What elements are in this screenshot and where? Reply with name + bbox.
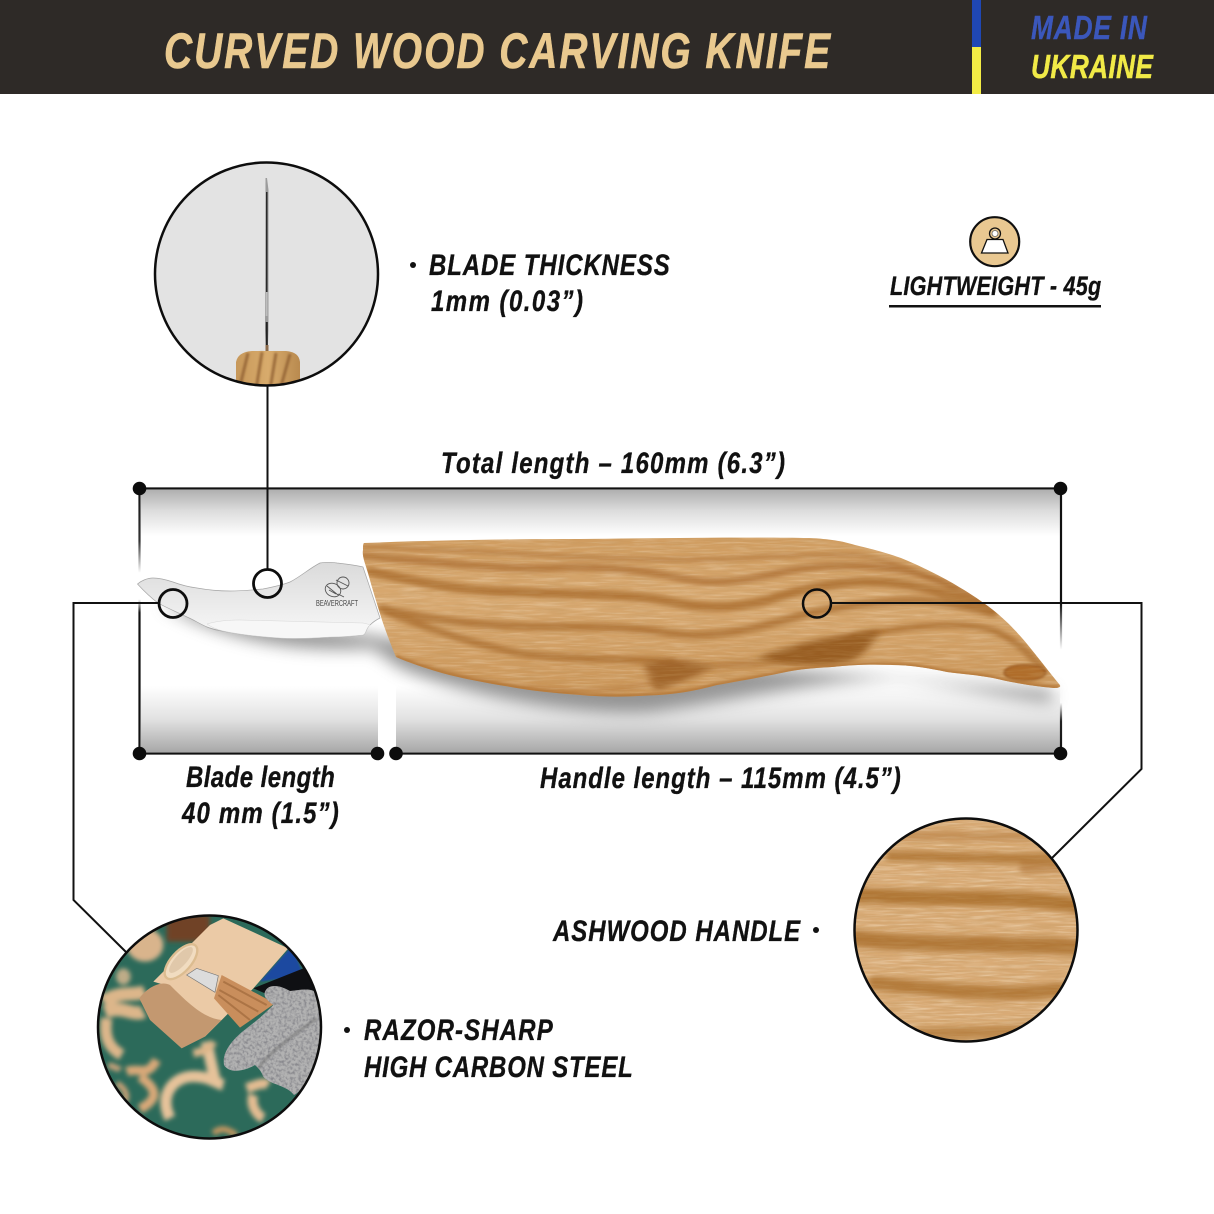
text: blade thickness: BLADE THICKNESS: [429, 247, 670, 282]
wood block: [139, 918, 288, 1048]
handle end stub: [236, 350, 300, 384]
panel: blade thickness detail circle: [155, 162, 378, 392]
callout marker: blade thickness: [254, 570, 282, 598]
lightweight spec: LIGHTWEIGHT - 45g: [890, 272, 1101, 302]
title: CURVED WOOD CARVING KNIFE: [164, 22, 832, 79]
glove: [224, 986, 320, 1095]
text: ashwood handle: ASHWOOD HANDLE: [552, 913, 801, 948]
dark grain knots: [644, 630, 880, 692]
made in Ukraine badge: UKRAINE: [1031, 49, 1154, 86]
label: handle length: Handle length – 115mm (4.5”): [540, 760, 901, 795]
text: blade thickness: [410, 247, 670, 318]
label: total length: Total length – 160mm (6.3”): [441, 445, 785, 480]
blade cutting bevel: [207, 620, 370, 638]
text: blade thickness: 1mm (0.03”): [431, 283, 583, 318]
wood grain bands: [364, 547, 1043, 691]
knife shadow: [160, 604, 1052, 713]
connector: edge to steel circle: [74, 603, 159, 953]
text: razor-sharp high carbon steel: [344, 1012, 633, 1084]
knife: [138, 530, 1070, 713]
dimension frame: [133, 482, 1067, 760]
panel: ashwood texture circle: [850, 815, 1082, 1045]
lightweight spec: [889, 217, 1101, 308]
callout marker: handle: [803, 590, 831, 618]
header bar: [0, 0, 1214, 94]
logo wordmark: BEAVERCRAFT: [316, 599, 358, 608]
label: blade length: 40 mm (1.5”): [181, 795, 339, 830]
panel: carving photo circle: [95, 912, 327, 1142]
label: blade length: Blade length: [186, 759, 335, 794]
wood grain bands: [855, 835, 1080, 1034]
Ukraine flag stripe: [972, 0, 981, 94]
icon: weight: [970, 217, 1019, 266]
handle: [362, 538, 1060, 697]
text: razor-sharp high carbon steel: HIGH CARBON STEEL: [364, 1049, 633, 1084]
connector: blade thickness circle to blade: [266, 386, 268, 570]
label: blade length: [181, 759, 339, 830]
cutting mat and blurred shavings: [103, 915, 268, 1135]
logo: beaver mark: [323, 577, 349, 599]
made in Ukraine badge: MADE IN: [1031, 10, 1148, 47]
carving chip curl: [164, 943, 198, 980]
connector: handle to ashwood circle: [831, 603, 1142, 858]
handle end knot: [1004, 665, 1046, 681]
blade: [138, 562, 380, 638]
callout marker: edge: [159, 590, 187, 618]
knife tip: [187, 968, 218, 992]
knife handle in hand: [214, 975, 275, 1028]
text: razor-sharp high carbon steel: RAZOR-SHARP: [364, 1012, 554, 1047]
blade edge-on view: [265, 178, 268, 354]
made in Ukraine badge: [1031, 10, 1154, 86]
